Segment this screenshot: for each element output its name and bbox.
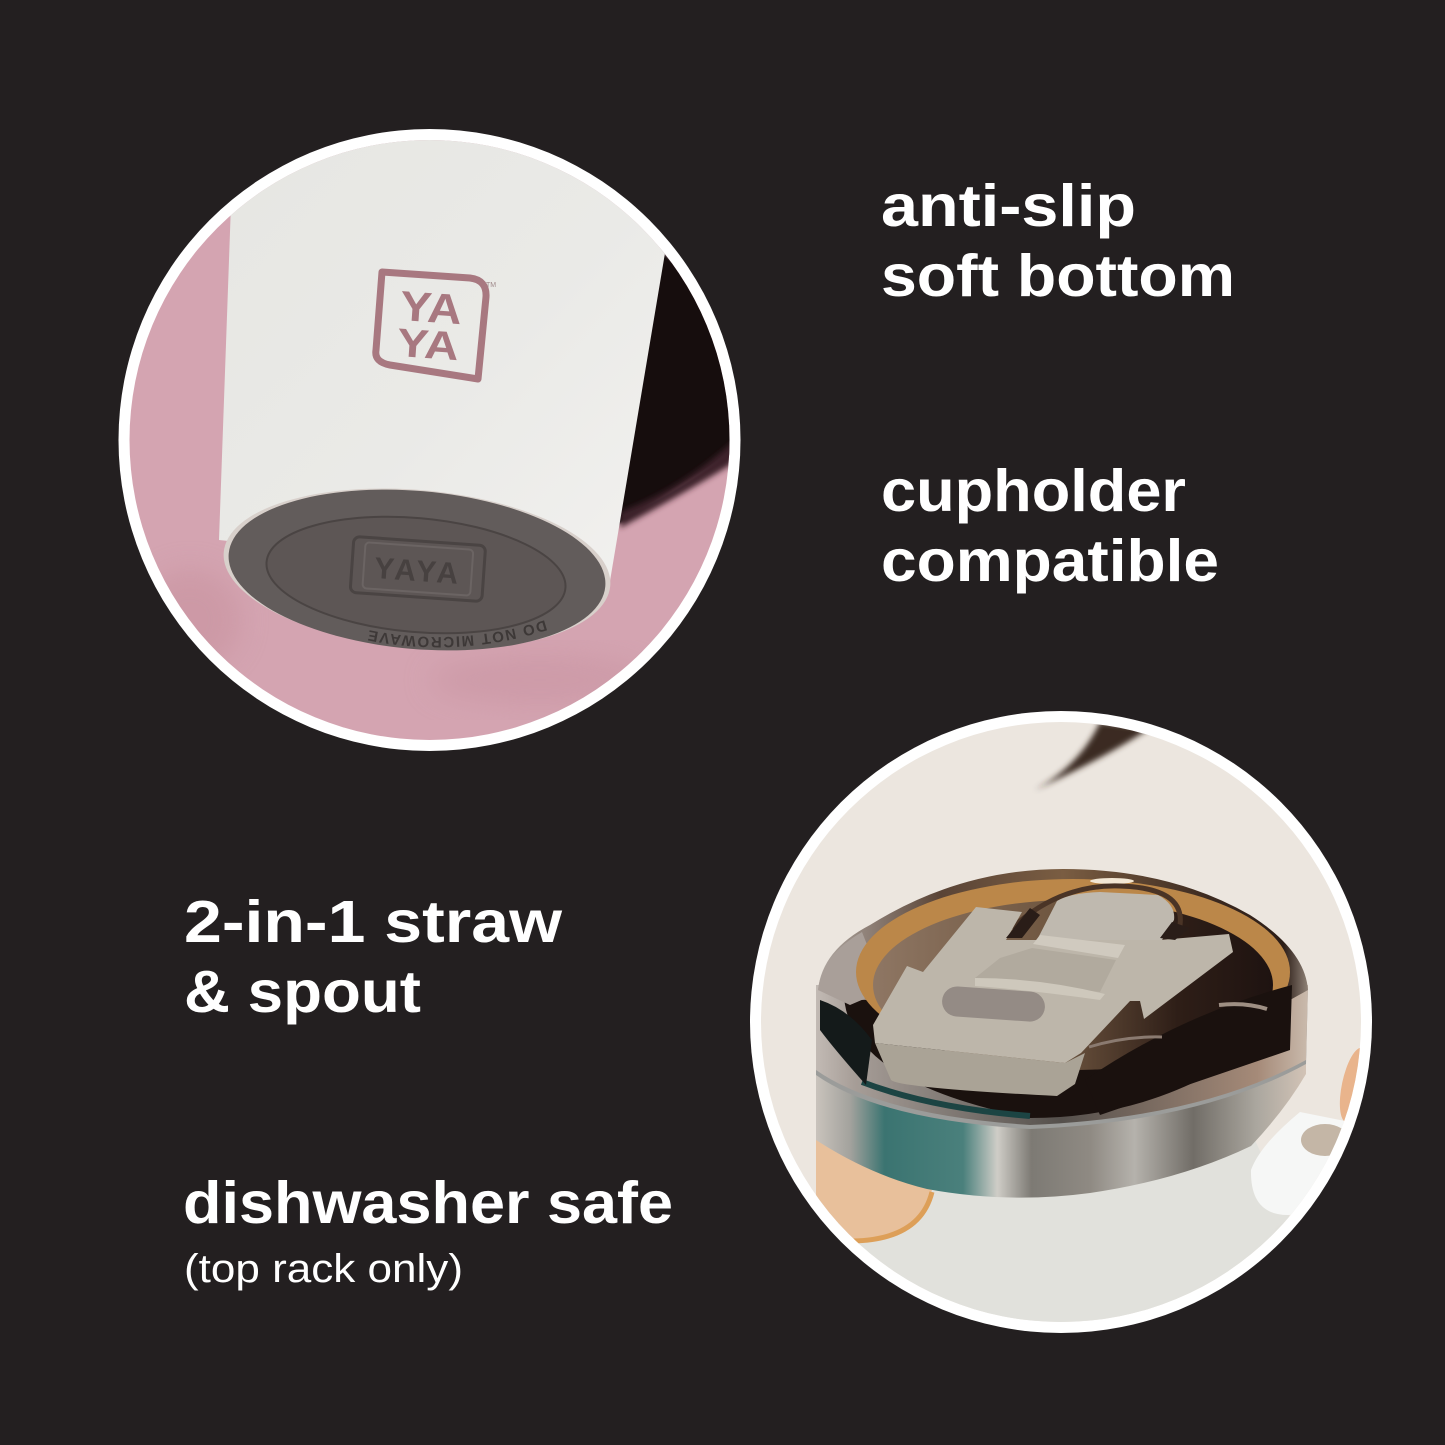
heading: dishwasher safe bbox=[183, 1170, 673, 1291]
heading: 2-in-1 straw and spout: & spout bbox=[184, 959, 421, 1025]
logo: YAYA: TM bbox=[486, 282, 496, 289]
logo: YAYA: YA bbox=[398, 282, 464, 333]
heading: 2-in-1 straw and spout bbox=[184, 889, 562, 1025]
heading: anti-slip soft bottom: anti-slip bbox=[881, 173, 1136, 239]
button bbox=[941, 985, 1046, 1023]
text: embossed base warning: DO NOT MICROWAVE bbox=[368, 620, 547, 648]
logo: YAYA bbox=[376, 272, 496, 379]
decor: rim highlight bbox=[1090, 878, 1134, 884]
photo: cup bottom with anti-slip base bbox=[118, 129, 740, 751]
heading: dishwasher safe: dishwasher safe bbox=[183, 1170, 673, 1236]
heading: cupholder compatible: cupholder bbox=[881, 458, 1186, 524]
icon: embossed base logo: YAYA bbox=[373, 552, 462, 591]
heading: cupholder compatible bbox=[881, 458, 1219, 594]
heading: anti-slip soft bottom: soft bottom bbox=[881, 243, 1235, 309]
heading: cupholder compatible: compatible bbox=[881, 528, 1219, 594]
icon: embossed base logo bbox=[350, 536, 486, 602]
lid latch bbox=[873, 886, 1233, 1096]
photo: lid with straw and spout bbox=[740, 700, 1380, 1340]
heading: anti-slip soft bottom bbox=[881, 173, 1235, 309]
heading: 2-in-1 straw and spout: 2-in-1 straw bbox=[184, 889, 562, 955]
logo: YAYA: YA bbox=[395, 321, 460, 369]
heading: dishwasher safe: (top rack only) bbox=[184, 1247, 463, 1291]
